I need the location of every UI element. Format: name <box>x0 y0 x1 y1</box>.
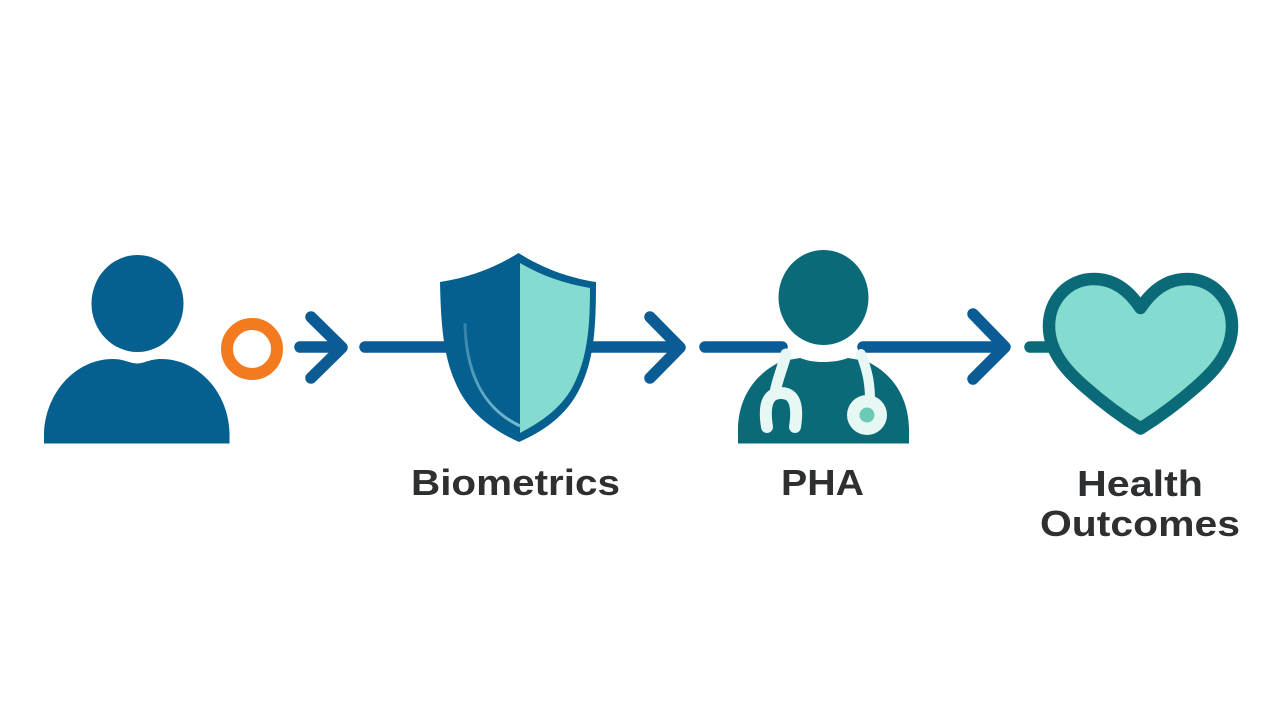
label: Health Outcomes <box>1040 463 1240 544</box>
icon: orange ring <box>227 324 277 374</box>
stethoscope <box>766 354 870 427</box>
label: PHA: PHA <box>781 462 864 503</box>
arrow: person to biometrics <box>300 317 342 378</box>
icon: shield <box>440 253 596 442</box>
label: Health Outcomes: Outcomes <box>1040 503 1240 544</box>
icon: heart <box>1049 279 1232 428</box>
arrow: through PHA <box>705 314 1005 379</box>
arrow: through shield <box>365 317 680 378</box>
label: Health Outcomes: Health <box>1077 463 1203 504</box>
connector: into heart <box>1030 341 1052 353</box>
icon: doctor with stethoscope <box>738 250 909 444</box>
icon: person <box>44 255 230 444</box>
label: Biometrics: Biometrics <box>411 462 620 503</box>
